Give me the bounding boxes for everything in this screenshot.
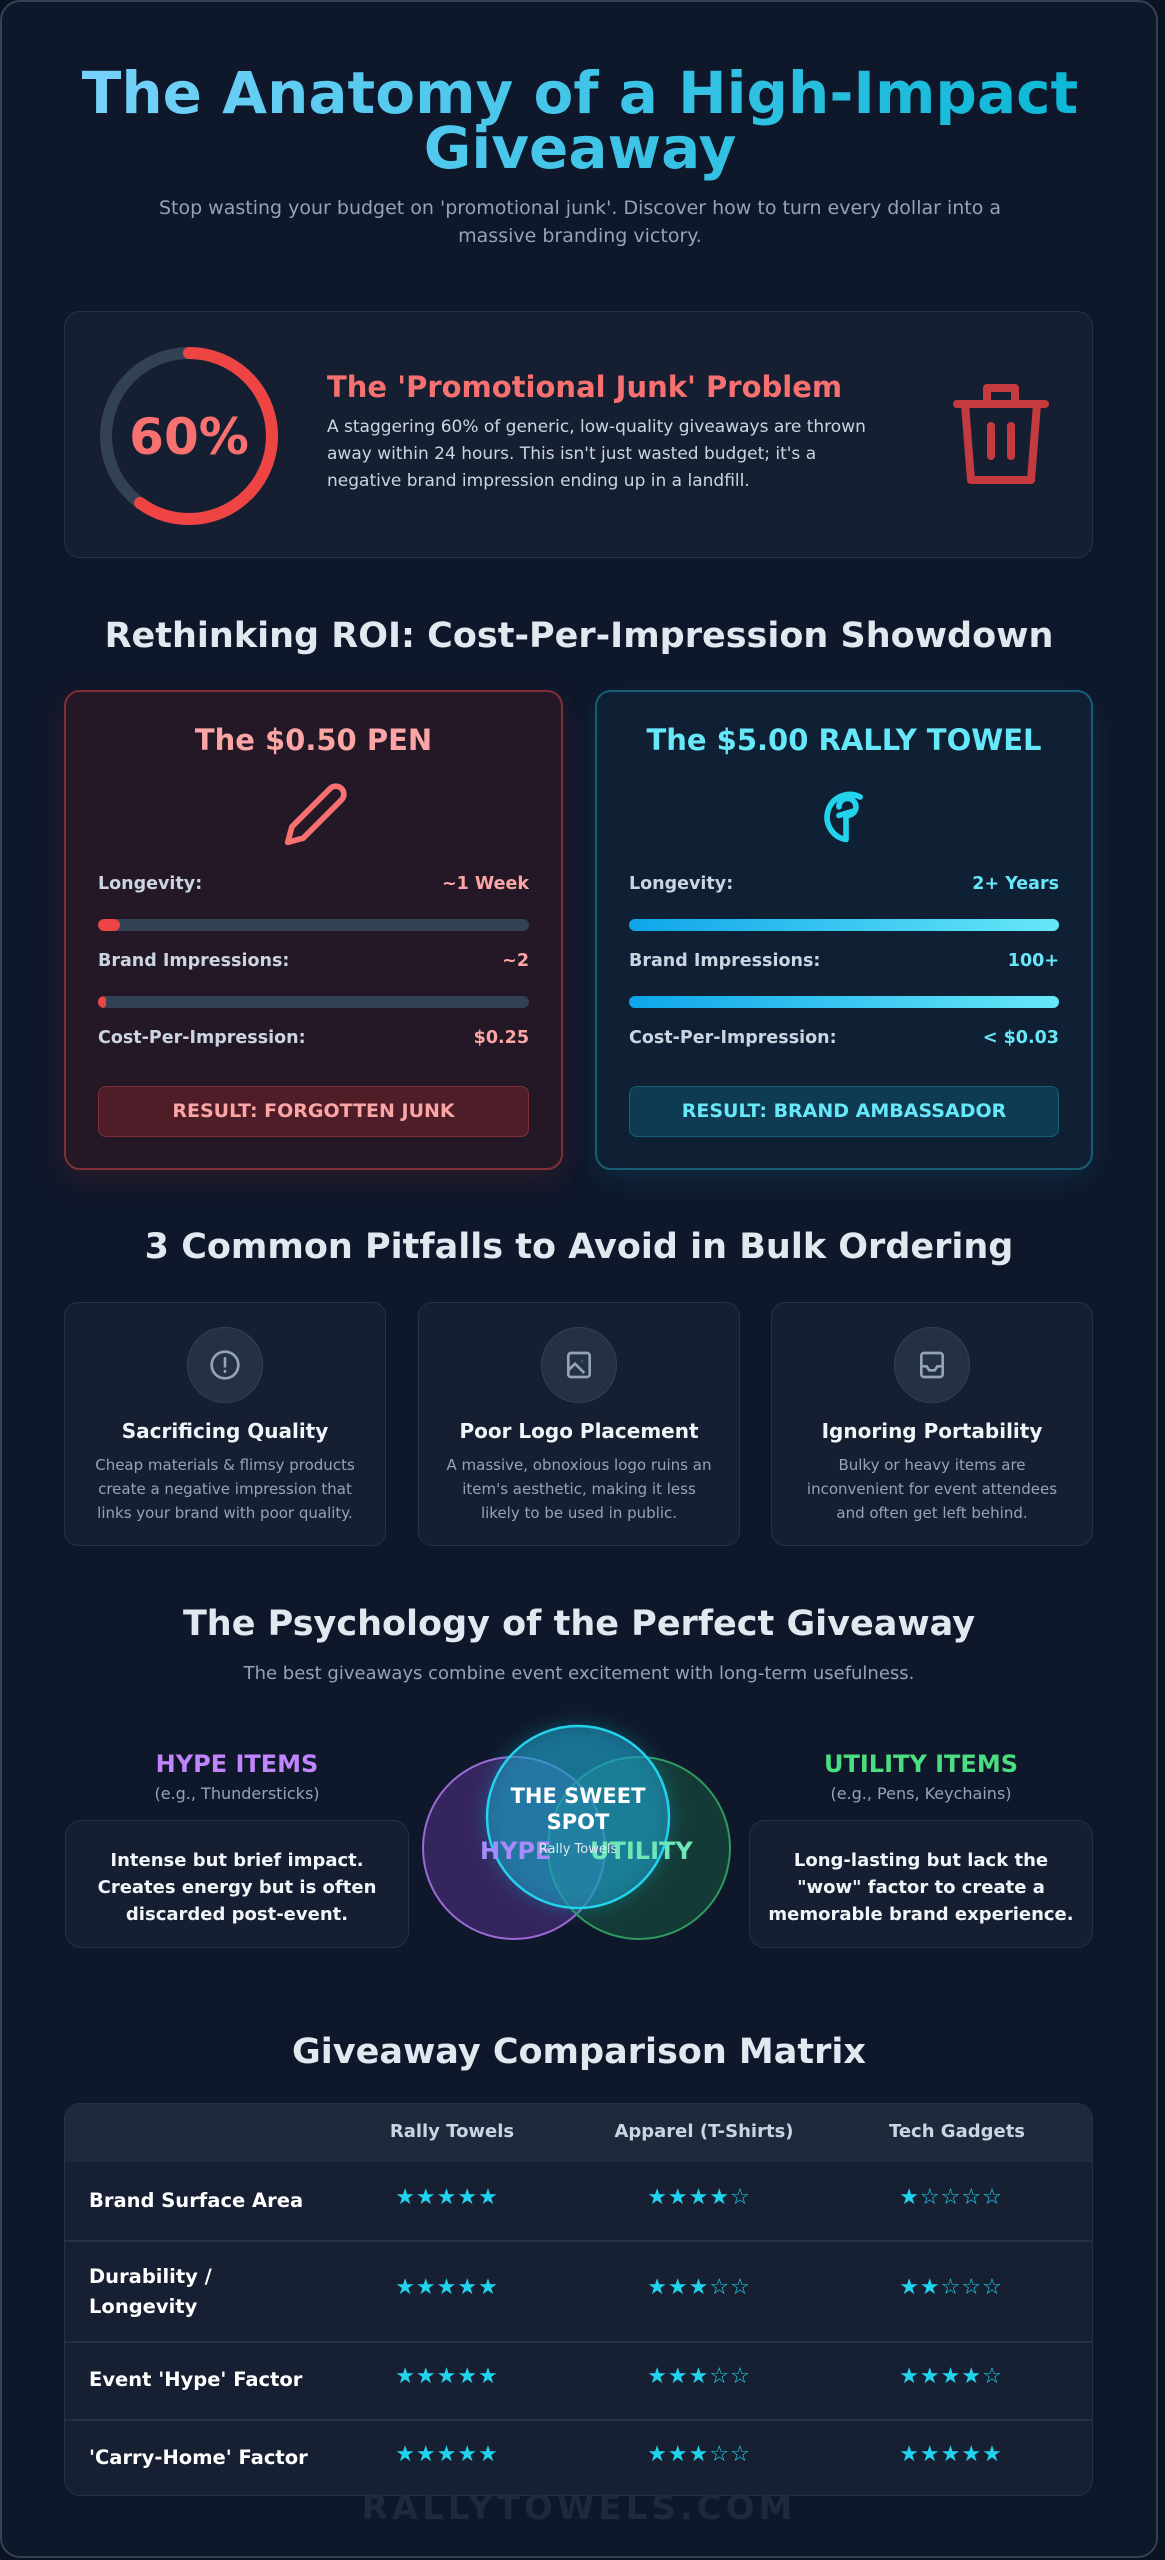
towel title: The $5.00 RALLY TOWEL bbox=[646, 723, 1042, 757]
comparison table: ★★★★★ bbox=[899, 2442, 1003, 2467]
donut chart 60% bbox=[100, 347, 278, 525]
utility box bbox=[749, 1820, 1093, 1948]
title: The Anatomy of a High-Impact bbox=[82, 59, 1078, 127]
panel: towel bbox=[595, 690, 1093, 1170]
panel: towel: 100+ bbox=[1008, 951, 1059, 971]
result badge bbox=[98, 1086, 529, 1137]
metrics: Longevity: bbox=[629, 874, 733, 894]
venn diagram: UTILITY bbox=[590, 1837, 693, 1865]
heading: The 'Promotional Junk' Problem bbox=[327, 370, 842, 404]
venn diagram: SPOT bbox=[547, 1810, 610, 1834]
result badge: RESULT: BRAND AMBASSADOR bbox=[682, 1100, 1006, 1122]
hype box: Creates energy but is often bbox=[98, 1877, 376, 1898]
donut chart 60%: 60% bbox=[129, 408, 249, 466]
result badge: RESULT: FORGOTTEN JUNK bbox=[172, 1100, 455, 1122]
comparison table: Rally Towels bbox=[390, 2121, 514, 2142]
panel: pitfall logo: A massive, obnoxious logo ruins an item's aesthetic, making it less likely to be used in public. bbox=[447, 1456, 711, 1522]
comparison table: ★★★★☆ bbox=[899, 2364, 1003, 2389]
result badge bbox=[629, 1086, 1059, 1137]
heading: ROI: Rethinking ROI: Cost-Per-Impression Showdown bbox=[105, 616, 1053, 656]
utility box: "wow" factor to create a bbox=[797, 1877, 1045, 1898]
icon: alert bbox=[187, 1327, 263, 1403]
subtitle: Stop wasting your budget on 'promotional junk'. Discover how to turn every dollar into a massive branding victory. bbox=[159, 197, 1001, 247]
comparison table: Tech Gadgets bbox=[889, 2121, 1025, 2142]
panel: pitfall logo: Poor Logo Placement bbox=[459, 1419, 699, 1443]
comparison table: ★★★☆☆ bbox=[647, 2364, 751, 2389]
panel: pitfall portability: Bulky or heavy items are inconvenient for event attendees and often get left behind. bbox=[807, 1456, 1057, 1522]
body text: A staggering 60% of generic, low-quality giveaways are thrown away within 24 hours. This isn't just wasted budget; it's a negative brand impression ending up in a landfill. bbox=[327, 417, 866, 491]
comparison table: 'Carry-Home' Factor bbox=[89, 2446, 308, 2469]
comparison table: ★★☆☆☆ bbox=[899, 2275, 1003, 2300]
comparison table: Durability / bbox=[89, 2265, 212, 2288]
panel: pitfall quality: Cheap materials & flimsy products create a negative impression that links your brand with poor quality. bbox=[95, 1456, 355, 1522]
panel: pen: Cost-Per-Impression: bbox=[98, 1028, 306, 1048]
utility label: (e.g., Pens, Keychains) bbox=[830, 1784, 1012, 1803]
panel: pen: ~2 bbox=[502, 951, 529, 971]
metrics: 2+ Years bbox=[972, 874, 1059, 894]
comparison table bbox=[64, 2103, 1093, 2496]
title: Giveaway bbox=[424, 114, 736, 182]
title bbox=[20, 66, 1140, 190]
heading: psychology: The Psychology of the Perfect Giveaway bbox=[183, 1604, 975, 1644]
panel: pitfall portability: Ignoring Portability bbox=[822, 1419, 1042, 1443]
icon: image bbox=[541, 1327, 617, 1403]
panel: pen: Brand Impressions: bbox=[98, 951, 289, 971]
hype label bbox=[154, 1750, 320, 1803]
pen title: The $0.50 PEN bbox=[195, 723, 432, 757]
comparison table: ★★★★☆ bbox=[647, 2185, 751, 2210]
panel: pitfall portability bbox=[771, 1302, 1093, 1546]
icon: tray bbox=[894, 1327, 970, 1403]
metrics: Longevity: bbox=[98, 874, 202, 894]
panel: towel: Brand Impressions: bbox=[629, 951, 820, 971]
venn diagram: THE SWEET bbox=[511, 1784, 646, 1808]
utility box: memorable brand experience. bbox=[768, 1904, 1074, 1925]
icon: towel swirl bbox=[824, 792, 863, 842]
panel: pitfall logo bbox=[418, 1302, 740, 1546]
hype box: Intense but brief impact. bbox=[110, 1850, 364, 1871]
hype label: (e.g., Thundersticks) bbox=[154, 1784, 320, 1803]
hype box bbox=[65, 1820, 409, 1948]
subtitle: psychology: The best giveaways combine event excitement with long-term usefulness. bbox=[244, 1663, 914, 1684]
heading: pitfalls: 3 Common Pitfalls to Avoid in Bulk Ordering bbox=[145, 1227, 1013, 1267]
panel: towel: Cost-Per-Impression: bbox=[629, 1028, 837, 1048]
venn diagram: HYPE bbox=[480, 1837, 551, 1865]
watermark: RALLYTOWELS.COM bbox=[362, 2488, 796, 2528]
comparison table: Apparel (T-Shirts) bbox=[614, 2121, 794, 2142]
utility box: Long-lasting but lack the bbox=[794, 1850, 1048, 1871]
panel: junk problem bbox=[64, 311, 1093, 558]
comparison table: ★★★☆☆ bbox=[647, 2275, 751, 2300]
comparison table: ★★★★★ bbox=[395, 2185, 499, 2210]
metrics bbox=[629, 874, 1059, 894]
comparison table: ★★★★★ bbox=[395, 2364, 499, 2389]
comparison table: ★☆☆☆☆ bbox=[899, 2185, 1003, 2210]
hype label: HYPE ITEMS bbox=[156, 1750, 318, 1778]
comparison table: Brand Surface Area bbox=[89, 2189, 303, 2212]
panel: towel: < $0.03 bbox=[983, 1028, 1059, 1048]
utility label: UTILITY ITEMS bbox=[824, 1750, 1018, 1778]
venn diagram bbox=[422, 1716, 731, 1940]
panel: pen: $0.25 bbox=[474, 1028, 529, 1048]
comparison table: ★★★☆☆ bbox=[647, 2442, 751, 2467]
hype box: discarded post-event. bbox=[126, 1904, 348, 1925]
metrics bbox=[98, 874, 530, 894]
panel: pen bbox=[64, 690, 563, 1170]
heading: matrix: Giveaway Comparison Matrix bbox=[292, 2032, 866, 2072]
icon: pen bbox=[284, 783, 347, 846]
metrics: ~1 Week bbox=[442, 874, 529, 894]
icon: trash bbox=[953, 384, 1049, 484]
panel: pitfall quality bbox=[64, 1302, 386, 1546]
utility label bbox=[824, 1750, 1018, 1803]
comparison table: ★★★★★ bbox=[395, 2442, 499, 2467]
venn diagram: Rally Towels bbox=[539, 1842, 617, 1857]
comparison table: ★★★★★ bbox=[395, 2275, 499, 2300]
comparison table: Event 'Hype' Factor bbox=[89, 2368, 302, 2391]
comparison table: Longevity bbox=[89, 2295, 197, 2318]
panel: pitfall quality: Sacrificing Quality bbox=[122, 1419, 328, 1443]
